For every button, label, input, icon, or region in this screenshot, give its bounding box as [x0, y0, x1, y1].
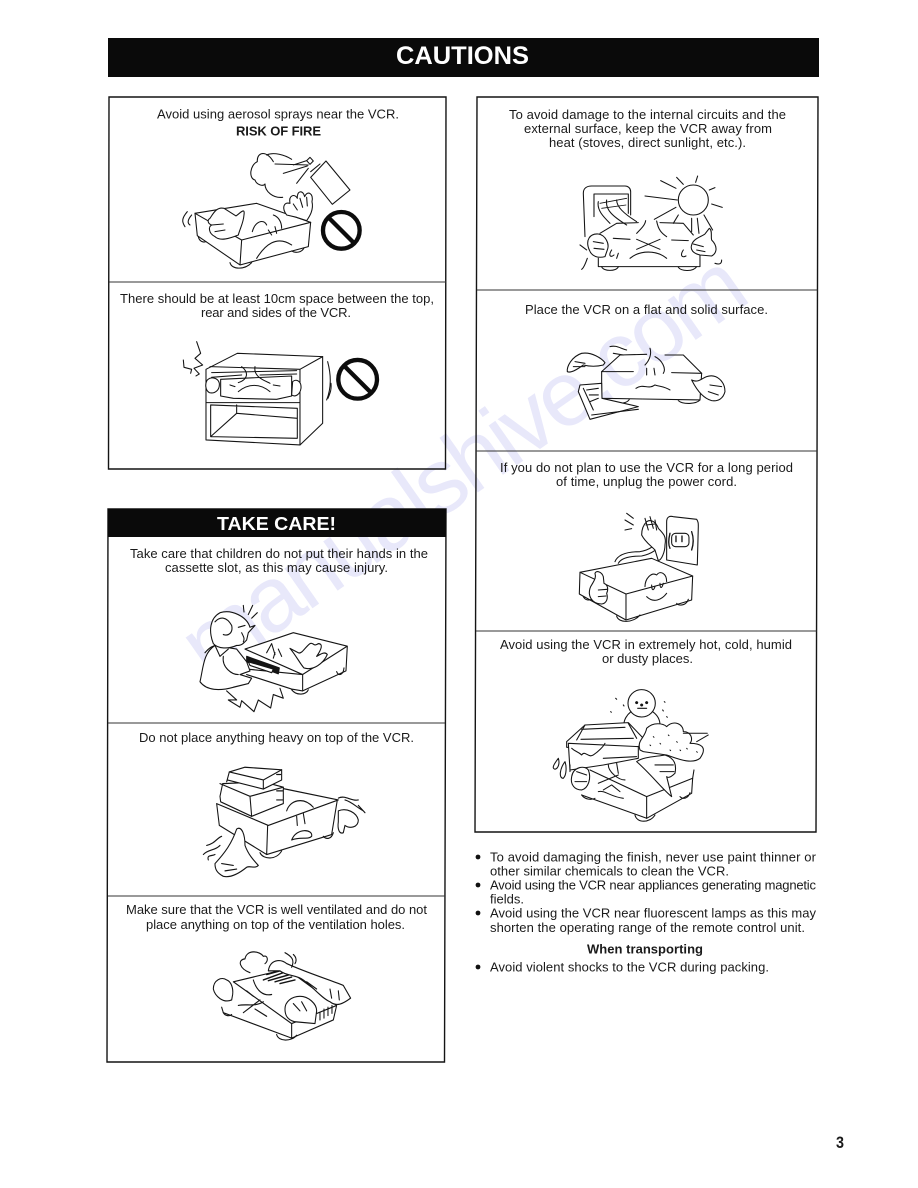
text: ventilation advice: [126, 902, 427, 932]
text: flat surface advice: Place the VCR on a flat and solid surface.: [525, 302, 768, 317]
text: heat warning: To avoid damage to the internal circuits and the: [509, 107, 786, 122]
bullet list: handling notes: fields.: [490, 892, 524, 906]
panel: take care: [107, 509, 446, 1062]
title bar: [108, 38, 819, 77]
bullet list: handling notes: [476, 850, 817, 974]
text: environment advice: Avoid using the VCR in extremely hot, cold, humid: [500, 637, 792, 652]
illustration: VCR cramped in cabinet: [183, 342, 331, 445]
illustration: VCR between heater and sun: [580, 176, 722, 270]
bullet list: handling notes: Avoid using the VCR near fluorescent lamps as this may: [490, 906, 816, 920]
text: no heavy objects: Do not place anything heavy on top of the VCR.: [139, 730, 414, 745]
text: children warning: Take care that children do not put their hands in the: [130, 546, 428, 561]
watermark: manualshive.com: [162, 232, 765, 697]
bullet list: handling notes: shorten the operating range of the remote control unit.: [490, 920, 805, 935]
illustration: VCR with snowman, dust and water: [553, 690, 708, 821]
icon: prohibition sign cabinet: [338, 360, 377, 399]
text: unplug advice: If you do not plan to use the VCR for a long period: [500, 460, 793, 475]
title bar: CAUTIONS: [396, 42, 529, 70]
text: heat warning: [509, 107, 786, 150]
subheading: when transporting: When transporting: [587, 942, 703, 956]
heading: take care: TAKE CARE!: [217, 513, 336, 534]
illustration: covered ventilation holes: [213, 952, 351, 1040]
text: spacing requirement: [120, 291, 434, 320]
heading: take care: [108, 509, 446, 537]
text: heat warning: heat (stoves, direct sunlight, etc.).: [549, 135, 746, 150]
text: aerosol warning: Avoid using aerosol sprays near the VCR.: [157, 106, 399, 122]
bullet list: handling notes: other similar chemicals to clean the VCR.: [490, 864, 729, 878]
bullet list: handling notes: Avoid using the VCR near appliances generating magnetic: [490, 878, 816, 892]
text: environment advice: [500, 637, 792, 666]
text: spacing requirement: There should be at least 10cm space between the top,: [120, 291, 434, 306]
panel: aerosol and spacing: [108, 97, 446, 469]
illustration: VCR sprayed with aerosol: [183, 154, 350, 268]
illustration: VCR tilted on a book: [567, 346, 725, 419]
illustration: VCR unplugging itself: [579, 513, 698, 621]
text: children warning: [130, 546, 428, 575]
text: spacing requirement: rear and sides of the VCR.: [201, 305, 351, 320]
text: ventilation advice: place anything on top of the ventilation holes.: [146, 917, 405, 932]
page number: 3: [836, 1133, 844, 1152]
text: unplug advice: of time, unplug the power cord.: [556, 474, 737, 489]
text: aerosol warning: RISK OF FIRE: [236, 124, 321, 138]
bullet list: handling notes: To avoid damaging the finish, never use paint thinner or: [490, 850, 817, 864]
text: environment advice: or dusty places.: [602, 651, 693, 666]
text: unplug advice: [500, 460, 793, 489]
text: ventilation advice: Make sure that the VCR is well ventilated and do not: [126, 902, 427, 917]
illustration: books crushing VCR: [203, 767, 365, 877]
panel: right column: [475, 97, 818, 832]
bullet list: handling notes: Avoid violent shocks to the VCR during packing.: [490, 960, 769, 974]
illustration: child hand in cassette slot: [200, 605, 347, 712]
text: children warning: cassette slot, as this may cause injury.: [165, 560, 388, 575]
text: aerosol warning: [157, 106, 399, 138]
icon: prohibition sign aerosol: [323, 212, 360, 249]
text: heat warning: external surface, keep the VCR away from: [524, 121, 772, 136]
